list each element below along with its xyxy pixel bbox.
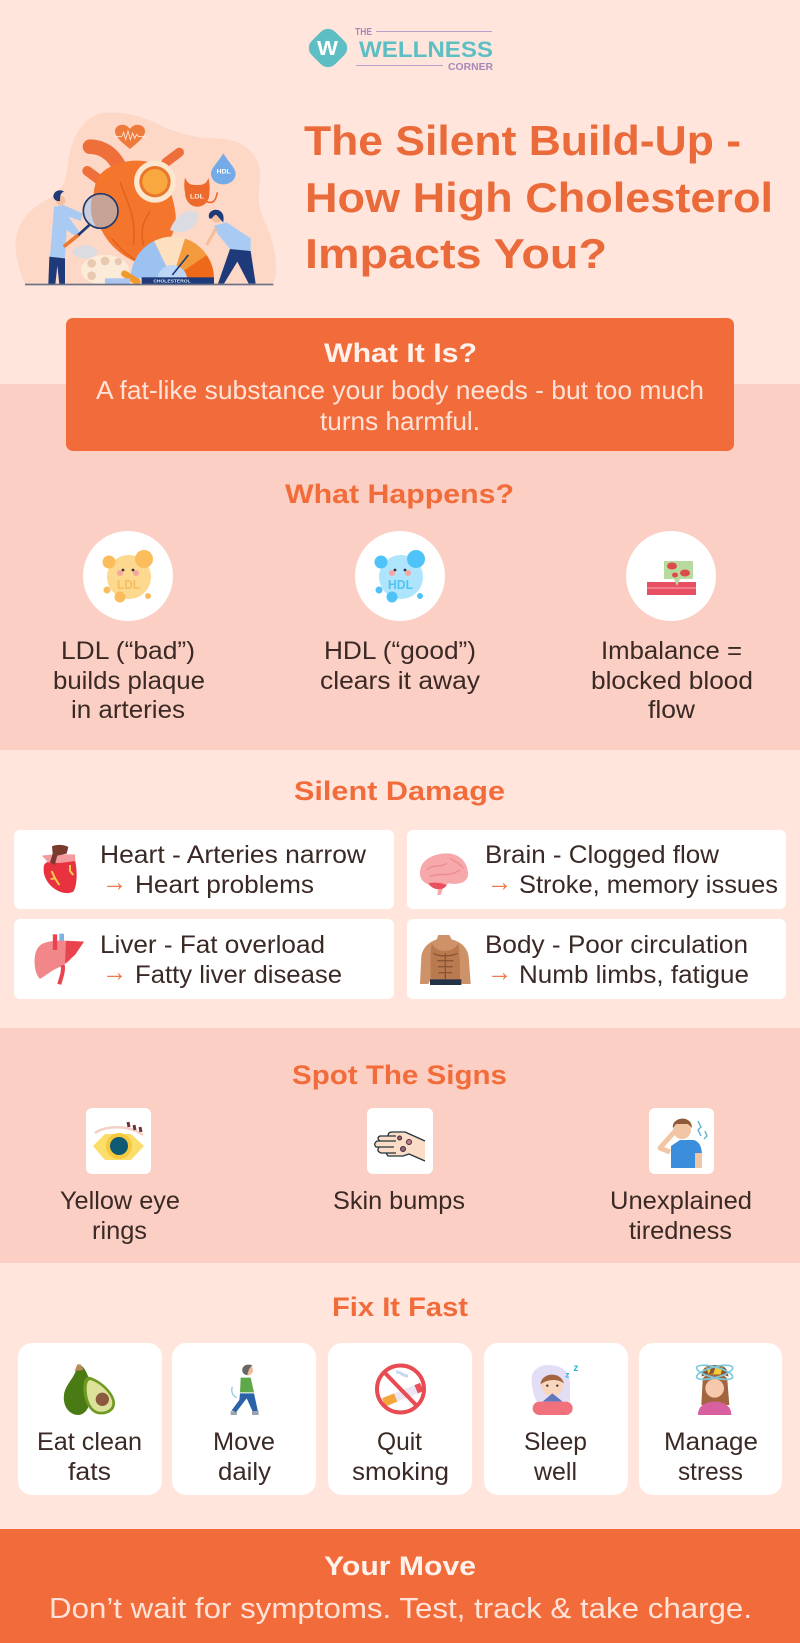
card: body: Body - Poor circulation — [485, 931, 748, 959]
icon: no smoking — [377, 1366, 424, 1412]
icon: HDL particle: HDL — [388, 577, 413, 592]
item: HDL — [320, 531, 481, 695]
card: manage stress: Manage — [664, 1428, 758, 1456]
callout: what it is: turns harmful. — [320, 406, 480, 436]
icon: torso — [420, 935, 471, 985]
panel: your move: Your Move — [324, 1551, 476, 1581]
card: quit smoking: smoking — [352, 1458, 449, 1486]
logo: THE — [355, 27, 372, 38]
icon: liver — [35, 934, 84, 984]
card: brain: Stroke, memory issues — [519, 871, 778, 899]
item: LDL: LDL (“bad”) — [61, 637, 195, 665]
card: manage stress: stress — [678, 1458, 743, 1486]
logo — [305, 25, 494, 73]
icon: HDL drop: HDL — [217, 169, 231, 176]
person: doctor with magnifier — [48, 190, 118, 284]
person: doctor at gauge — [207, 210, 256, 284]
card: body — [407, 919, 786, 999]
panel: your move — [0, 1529, 800, 1643]
card: quit smoking: Quit — [377, 1428, 422, 1456]
icon: LDL particle: LDL — [117, 577, 140, 592]
card: heart: Heart problems — [135, 871, 314, 899]
item: LDL — [53, 531, 205, 724]
sign: skin bumps: Skin bumps — [333, 1187, 465, 1215]
callout: what it is: A fat-like substance your body needs - but too much — [96, 375, 704, 405]
illustration: doctors examining a heart and cholesterol gauge — [16, 112, 276, 286]
item: HDL: HDL (“good”) — [324, 637, 476, 665]
icon: tired man — [660, 1119, 707, 1168]
sign: unexplained tiredness: Unexplained — [610, 1187, 752, 1215]
icon: brain — [420, 853, 468, 895]
panel: fix it fast — [0, 1263, 800, 1529]
card: heart: → — [102, 866, 127, 897]
card: brain: → — [487, 866, 512, 897]
card: body: → — [487, 956, 512, 987]
callout: what it is: What It Is? — [324, 338, 477, 368]
heart organ — [87, 147, 179, 265]
card: liver: → — [102, 956, 127, 987]
card: sleep well — [484, 1343, 628, 1495]
sign: unexplained tiredness — [610, 1108, 752, 1245]
panel: header — [0, 0, 800, 384]
card: move daily: Move — [213, 1428, 275, 1456]
card: brain — [407, 830, 786, 909]
icon: sleeping person: z — [565, 1371, 569, 1380]
card: eat clean fats: Eat clean — [37, 1428, 142, 1456]
icon: avocado — [64, 1364, 115, 1415]
icon: LDL devil: LDL — [190, 193, 204, 200]
panel: silent damage — [0, 750, 800, 1028]
icon: eye — [93, 1122, 144, 1160]
heading: what happens: What Happens? — [285, 479, 514, 509]
item: imbalance: flow — [648, 696, 696, 724]
item: imbalance — [591, 531, 753, 724]
leaves — [170, 211, 198, 232]
card: liver: Liver - Fat overload — [100, 931, 325, 959]
title: The Silent Build-Up - — [304, 117, 741, 164]
icon: sleeping person — [532, 1363, 578, 1415]
item: imbalance: Imbalance = — [601, 637, 742, 665]
card: move daily: daily — [218, 1458, 272, 1486]
title — [304, 117, 773, 277]
card: brain: Brain - Clogged flow — [485, 841, 720, 869]
card: liver: Fatty liver disease — [135, 961, 342, 989]
icon: HDL drop — [211, 153, 236, 184]
pill pack — [81, 255, 129, 285]
card: heart: Heart - Arteries narrow — [100, 841, 367, 869]
card: body: Numb limbs, fatigue — [519, 961, 749, 989]
card: sleep well: Sleep — [524, 1428, 587, 1456]
logo: WELLNESS — [359, 37, 493, 62]
item: LDL: builds plaque — [53, 667, 205, 695]
panel: your move: Don’t wait for symptoms. Test, track & take charge. — [49, 1593, 752, 1625]
heading: silent damage: Silent Damage — [294, 776, 505, 806]
sign: yellow eye rings — [60, 1108, 180, 1245]
gauge: CHOLESTEROL — [153, 279, 191, 284]
item: LDL: in arteries — [71, 696, 185, 724]
sign: skin bumps — [333, 1108, 465, 1215]
icon: HDL particle — [374, 550, 425, 602]
callout: what it is — [66, 318, 734, 451]
item: imbalance: blocked blood — [591, 667, 753, 695]
card: eat clean fats — [18, 1343, 162, 1495]
item: HDL: clears it away — [320, 667, 481, 695]
card: heart — [14, 830, 394, 909]
icon: heart pulse — [114, 125, 146, 149]
sign: unexplained tiredness: tiredness — [629, 1217, 732, 1245]
heading: spot the signs: Spot The Signs — [292, 1060, 507, 1090]
icon: LDL particle — [102, 550, 153, 602]
title: How High Cholesterol — [305, 174, 773, 221]
gauge — [105, 237, 214, 286]
logo: W — [317, 38, 338, 60]
icon: LDL devil — [184, 178, 217, 207]
icon: stressed woman — [695, 1362, 734, 1415]
panel: spot the signs — [0, 1028, 800, 1263]
icon: hand with bumps — [375, 1132, 425, 1161]
panel: what happens — [0, 318, 800, 750]
card: eat clean fats: fats — [68, 1458, 111, 1486]
card: quit smoking — [328, 1343, 472, 1495]
logo: CORNER — [448, 62, 494, 73]
icon: blocked artery — [647, 561, 696, 595]
icon: walking person — [231, 1365, 259, 1415]
sign: yellow eye rings: Yellow eye — [60, 1187, 180, 1215]
card: liver — [14, 919, 394, 999]
card: sleep well: well — [533, 1458, 577, 1486]
card: move daily — [172, 1343, 316, 1495]
icon: sleeping person: z — [573, 1363, 578, 1374]
card: manage stress — [639, 1343, 782, 1495]
heading: fix it fast: Fix It Fast — [332, 1292, 468, 1322]
sign: yellow eye rings: rings — [92, 1217, 147, 1245]
title: Impacts You? — [305, 230, 607, 277]
icon: heart — [42, 845, 77, 893]
